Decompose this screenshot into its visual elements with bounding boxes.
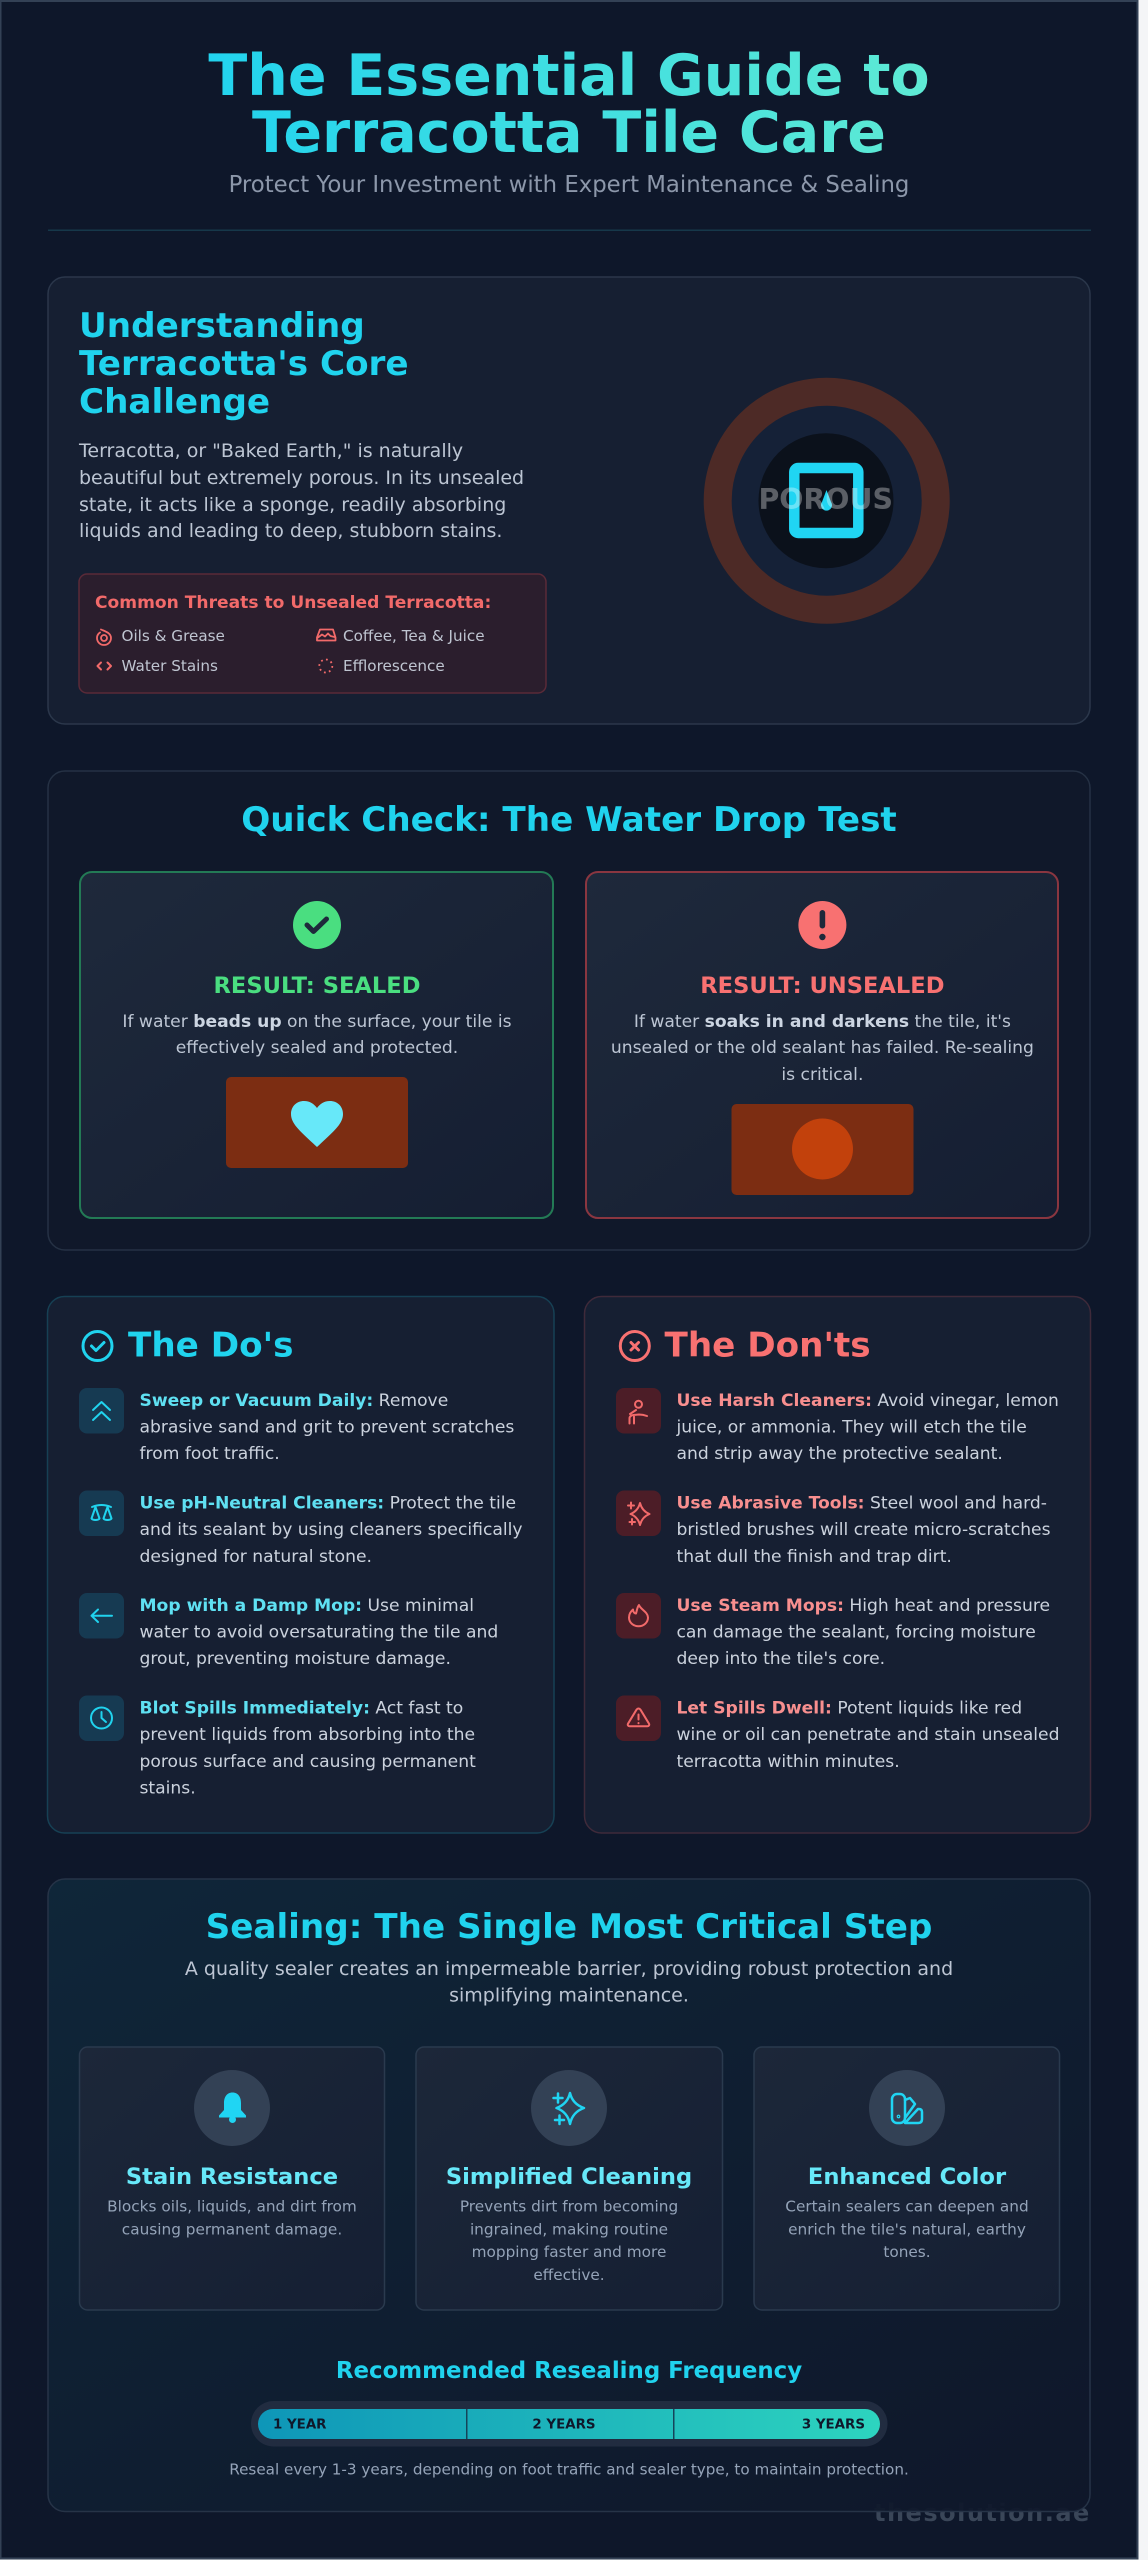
icon: check [293,901,341,949]
panel: sealing [48,1879,1090,2512]
item: damp mop: water to avoid oversaturating the tile and [140,1623,498,1643]
illustration: water beading on tile [226,1077,408,1168]
icon: flame [616,1593,661,1638]
heading: core challenge: Terracotta's Core [79,344,409,384]
icon: chevrons up [79,1388,124,1434]
item: steam mops: deep into the tile's core. [676,1649,885,1669]
icon: oils and grease [97,630,111,645]
result text: unsealed: is critical. [781,1065,863,1085]
item: pH-neutral [79,1490,523,1567]
benefit title: Enhanced Color [808,2164,1007,2190]
heading: water drop test: Quick Check: The Water Drop Test [241,800,897,840]
threat label: coffee: Coffee, Tea & Juice [343,627,485,645]
icon: exclamation [798,901,846,949]
icon: bell [194,2070,270,2146]
item: spills dwell: wine or oil can penetrate and stain unsealed [676,1725,1059,1745]
benefit title: Simplified Cleaning [446,2164,692,2190]
card: unsealed result [586,872,1058,1218]
item: blot spills: stains. [140,1778,196,1798]
heading: sealing: Sealing: The Single Most Critical Step [206,1907,932,1947]
item: sweep: Sweep or Vacuum Daily: Remove [140,1391,448,1411]
item: blot spills: porous surface and causing permanent [140,1752,476,1772]
illustration: water soaking into tile [732,1104,914,1195]
item: pH-neutral: Use pH-Neutral Cleaners: Protect the tile [140,1494,516,1514]
threat label: efflorescence: Efflorescence [343,657,445,675]
result text: sealed: If water beads up on the surface, your tile is [122,1012,512,1032]
card: simplified cleaning [416,2047,722,2310]
item: spills dwell [616,1696,1059,1772]
heading: core challenge: Challenge [79,382,270,422]
item: damp mop: Mop with a Damp Mop: Use minimal [140,1596,474,1616]
item: abrasive tools: bristled brushes will create micro-scratches [676,1520,1051,1540]
benefit text: Blocks oils, liquids, and dirt from [107,2198,357,2216]
heading: resealing frequency: Recommended Resealing Frequency [336,2358,802,2384]
intro paragraph: state, it acts like a sponge, readily absorbing [79,494,506,516]
watermark: thesolution.ae [874,2499,1091,2527]
resealing caption: Reseal every 1-3 years, depending on foot traffic and sealer type, to maintain protection. [229,2461,909,2479]
card: enhanced color [754,2047,1060,2310]
sealing intro: A quality sealer creates an impermeable barrier, providing robust protection and [185,1958,953,1980]
icon: person [616,1388,661,1434]
item: sweep [79,1388,514,1464]
item: harsh cleaners: and strip away the protective sealant. [676,1444,1003,1464]
item: steam mops: can damage the sealant, forcing moisture [676,1623,1036,1643]
icon: x circle [620,1332,649,1360]
benefit text: effective. [533,2266,605,2284]
icon: arrow left [79,1593,124,1638]
item: spills dwell: Let Spills Dwell: Potent liquids like red [676,1699,1022,1719]
item: steam mops: Use Steam Mops: High heat and pressure [676,1596,1050,1616]
threat label: water stains: Water Stains [122,657,218,675]
icon: coffee tea juice [317,630,336,640]
icon: clock [79,1696,124,1741]
intro paragraph: beautiful but extremely porous. In its unsealed [79,467,524,489]
item: abrasive tools [616,1490,1051,1567]
item: harsh cleaners: Use Harsh Cleaners: Avoid vinegar, lemon [676,1391,1059,1411]
result heading: unsealed: RESULT: UNSEALED [700,973,945,999]
item: steam mops [616,1593,1050,1669]
subtitle: Protect Your Investment with Expert Maintenance & Sealing [229,172,909,198]
benefit title: Stain Resistance [126,2164,338,2190]
intro paragraph: liquids and leading to deep, stubborn stains. [79,520,502,542]
panel: water drop test [48,771,1090,1250]
item: sweep: from foot traffic. [140,1444,280,1464]
threat label: oils: Oils & Grease [122,627,225,645]
panel: the don'ts [584,1296,1090,1833]
benefit text: mopping faster and more [472,2243,666,2261]
graphic: porous tile rings: POROUS [758,483,893,516]
icon: scale [79,1490,124,1536]
graphic: porous tile rings [718,392,936,610]
benefit text: tones. [883,2243,931,2261]
icon: swatch [869,2070,945,2146]
result heading: sealed: RESULT: SEALED [214,973,420,999]
panel: core challenge [48,277,1090,724]
benefit text: Certain sealers can deepen and [785,2198,1029,2216]
card: stain resistance [80,2047,384,2310]
result text: sealed: effectively sealed and protected. [176,1038,458,1058]
result text: unsealed: If water soaks in and darkens the tile, it's [634,1012,1011,1032]
icon: warning [616,1696,661,1741]
item: harsh cleaners [616,1388,1059,1464]
item: pH-neutral: and its sealant by using cleaners specifically [140,1520,523,1540]
heading: core challenge: Understanding [79,306,365,346]
chart: resealing timeline bar: 3 YEARS [802,2418,865,2432]
intro paragraph: Terracotta, or "Baked Earth," is naturally [78,440,463,462]
icon: sparkles [616,1490,661,1536]
item: blot spills: Blot Spills Immediately: Act fast to [140,1699,463,1719]
benefit text: causing permanent damage. [122,2220,342,2238]
item: damp mop [79,1593,498,1669]
icon: water stains [98,662,111,670]
title: The Essential Guide to [208,43,930,109]
icon: check circle [83,1332,112,1360]
chart: resealing timeline bar: 1 YEAR [273,2418,327,2432]
icon: efflorescence [319,660,332,672]
result text: unsealed: unsealed or the old sealant has failed. Re-sealing [611,1038,1034,1058]
item: blot spills [79,1696,476,1798]
icon: sparkles [531,2070,607,2146]
panel: the do's [48,1296,554,1833]
item: damp mop: grout, preventing moisture damage. [140,1649,451,1669]
item: spills dwell: terracotta within minutes. [676,1752,900,1772]
heading: the don'ts: The Don'ts [664,1326,871,1366]
callout heading: Common Threats to Unsealed Terracotta: [95,593,491,613]
item: abrasive tools: that dull the finish and trap dirt. [676,1547,952,1567]
item: sweep: abrasive sand and grit to prevent scratches [140,1418,514,1438]
item: abrasive tools: Use Abrasive Tools: Steel wool and hard- [676,1494,1047,1514]
item: harsh cleaners: juice, or ammonia. They will etch the tile [676,1418,1027,1438]
title: Terracotta Tile Care [252,100,886,166]
item: blot spills: prevent liquids from absorbing into the [140,1725,475,1745]
sealing intro: simplifying maintenance. [449,1985,689,2007]
benefit text: ingrained, making routine [470,2220,668,2238]
benefit text: enrich the tile's natural, earthy [788,2220,1026,2238]
heading: the do's: The Do's [128,1326,293,1366]
chart: resealing timeline bar: 2 YEARS [532,2418,596,2432]
card: sealed result [80,872,553,1218]
chart: resealing timeline bar [251,2401,888,2446]
item: pH-neutral: designed for natural stone. [140,1547,372,1567]
benefit text: Prevents dirt from becoming [460,2198,678,2216]
callout: common threats [79,574,546,693]
